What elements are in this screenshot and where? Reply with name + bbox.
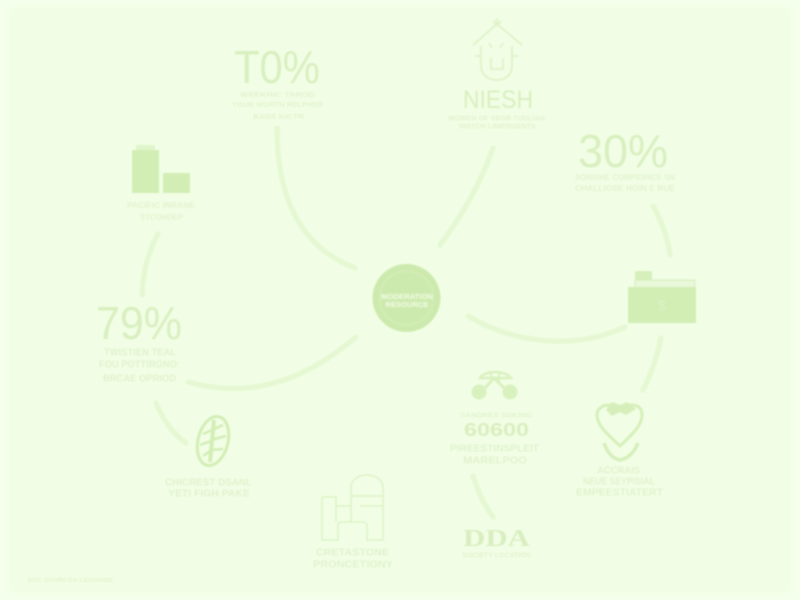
- heading: NIESH: [448, 86, 545, 130]
- stat description: WEEKRIC TAROD: [240, 90, 316, 99]
- house description: WATCH LIMERGENTS: [459, 122, 536, 130]
- stat description: PIREESTINSPLEIT: [450, 444, 539, 454]
- logo caption: SOCIETY LOCATION: [462, 550, 531, 560]
- logo: DDA: [462, 526, 531, 560]
- leaf caption: CHICREST DSANL: [165, 478, 252, 488]
- stat: top 70%: T0%: [234, 41, 320, 93]
- stat description: FOU POTTIRGNO:: [99, 360, 180, 370]
- bar chart caption: PACIFIC INRANE: [127, 201, 196, 210]
- heart caption: NEUE SEYPISIAL: [583, 476, 655, 488]
- connector: 30% stat to folder: [653, 206, 670, 255]
- house description: WOMEN OF SEOR TUDLIAN: [448, 114, 545, 122]
- logo: DDA: DDA: [463, 526, 531, 552]
- building caption: CRETASTONE: [316, 548, 389, 558]
- stat: 60600: 60600: [464, 420, 529, 440]
- building caption: PRONCETIONY: [313, 560, 393, 570]
- stat description: BRCAE OPRIOD: [103, 374, 176, 384]
- heading: NIESH: NIESH: [463, 86, 533, 114]
- stat: 60600: [450, 410, 539, 466]
- stat: 79%: 79%: [96, 297, 182, 349]
- connector: folder to heart: [643, 338, 661, 390]
- central hub badge: RESOURCE: [386, 300, 428, 309]
- icon: glasses: [472, 372, 518, 400]
- stat description: SONISHE COMPIDINCE SN: [575, 172, 675, 182]
- footer note: SOC SOURCES LEGHOSS: [27, 578, 113, 584]
- connector: top-left stat to hub: [277, 128, 355, 268]
- icon: building: [322, 475, 383, 540]
- stat description: BADS KICTR: [253, 112, 305, 121]
- icon: folder: [628, 271, 696, 323]
- stat: 30%: 30%: [578, 125, 668, 177]
- hub label: MODERATION: [381, 292, 433, 301]
- connector: bars to 79% stat: [142, 234, 158, 295]
- stat: 79%: [96, 297, 182, 384]
- stat: top 70%: [232, 41, 324, 121]
- bar chart caption: STCOHDEP: [140, 213, 184, 222]
- connector: 79% stat to leaf: [156, 403, 186, 443]
- stat overline: SANDRES SOKING: [460, 410, 532, 420]
- icon: leaf: [192, 413, 234, 469]
- icon: bar chart: [132, 145, 190, 193]
- stat description: TWISTIEN TEAL: [104, 348, 176, 358]
- heart caption: ACCRAIS: [597, 466, 640, 476]
- stat description: YOUR WORTH RELPHER: [232, 100, 324, 109]
- stat description: CHALLIOSE HOIN E RUE: [575, 183, 675, 193]
- icon: house: [473, 18, 522, 80]
- leaf caption: YETI FIGH PAKE: [168, 488, 250, 500]
- connector: hub to 79% stat: [188, 337, 356, 388]
- infographic content: [27, 18, 696, 584]
- connector: hub to folder: [468, 316, 625, 341]
- central hub badge: [372, 264, 440, 332]
- heart caption: EMPEESTIATERT: [576, 488, 663, 498]
- stat description: MARELPOO: [463, 456, 527, 466]
- icon: heart fruit: [597, 402, 642, 460]
- connector: house to hub: [440, 148, 493, 245]
- connector: glasses stat to DDA: [473, 476, 493, 517]
- icon: folder: $: [658, 297, 666, 313]
